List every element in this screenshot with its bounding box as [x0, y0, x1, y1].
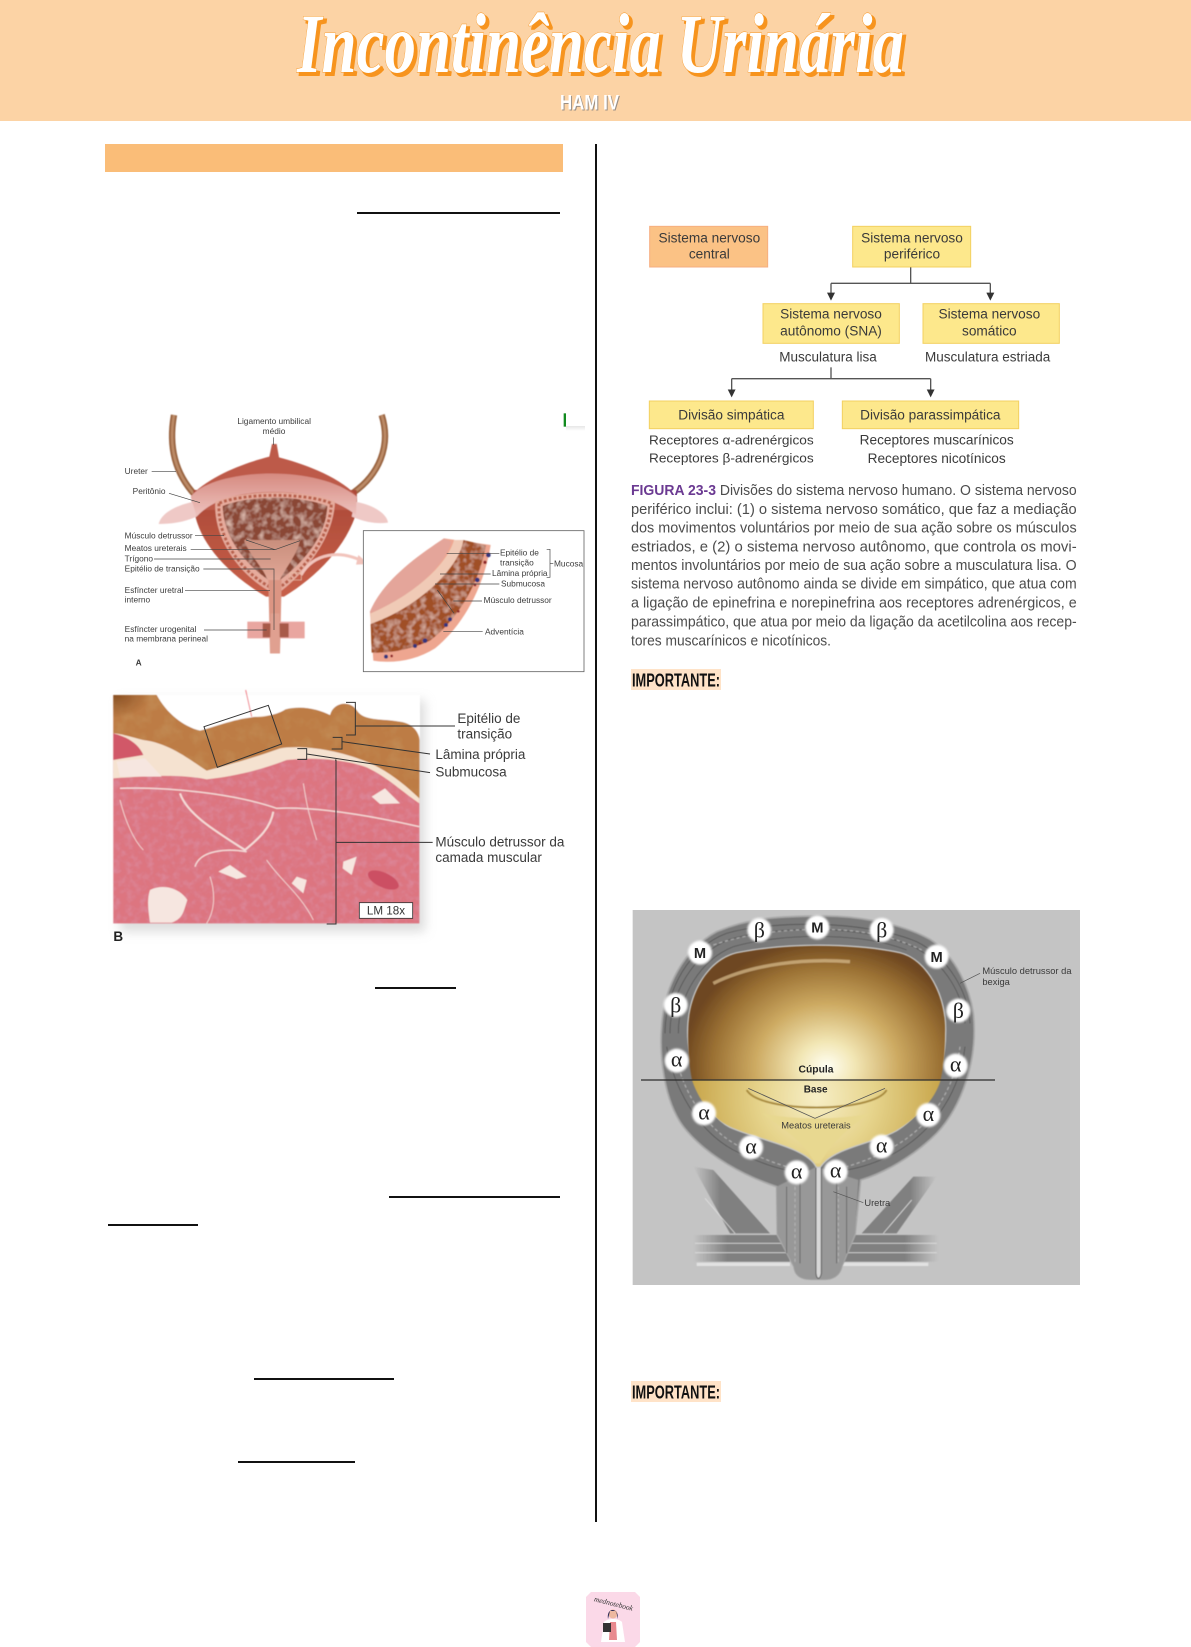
section heading bar	[105, 144, 563, 172]
figure B: histology micrograph	[112, 690, 565, 944]
figure A labels: Esfíncter uretral	[125, 585, 184, 595]
scale tag: LM 18x	[367, 905, 405, 918]
figure A labels	[125, 416, 311, 668]
figure caption: tores muscarínicos e nicotínicos.	[631, 634, 831, 650]
detail inset: bladder wall layers: transição	[500, 557, 534, 567]
logo: mednotebook	[593, 1594, 635, 1613]
somatic box: Sistema nervoso	[938, 307, 1041, 322]
detail inset: bladder wall layers: Lâmina própria	[492, 568, 548, 578]
figure caption: periférico inclui: (1) o sistema nervoso somático, que faz a mediação	[631, 502, 1077, 518]
receptor markers: α	[671, 1047, 683, 1072]
receptor markers: α	[830, 1158, 842, 1183]
figure B labels: B	[113, 929, 123, 944]
peripheral nervous system box	[853, 226, 971, 267]
underlined blank text 1	[357, 212, 560, 214]
central nervous system box	[650, 226, 768, 267]
receptor labels: Receptores muscarínicos	[860, 432, 1014, 447]
logo	[586, 1592, 640, 1647]
anatomical drawing	[159, 415, 388, 653]
detail inset: bladder wall layers	[363, 531, 584, 672]
figure A labels: Trígono	[125, 553, 153, 563]
figure B labels: Lâmina própria	[435, 747, 526, 762]
underlined blank text 2	[375, 987, 456, 988]
receptor figure labels: Meatos ureterais	[781, 1120, 851, 1130]
central nervous system box: Sistema nervoso	[658, 231, 761, 246]
peripheral nervous system box: periférico	[884, 247, 940, 262]
figure B labels: camada muscular	[435, 850, 542, 865]
figure B labels: transição	[457, 727, 512, 742]
detail inset: bladder wall layers: Epitélio de	[500, 548, 539, 558]
receptor markers: α	[791, 1158, 803, 1183]
receptor figure labels: bexiga	[982, 977, 1011, 987]
figure B labels: Submucosa	[435, 765, 507, 780]
figure A labels: Esfíncter urogenital	[125, 624, 197, 634]
peripheral nervous system box: Sistema nervoso	[861, 231, 963, 246]
receptor figure labels: Cúpula	[798, 1064, 834, 1075]
autonomic box	[763, 304, 899, 343]
receptor figure labels	[781, 966, 1072, 1208]
receptor markers: α	[950, 1052, 962, 1077]
pelvic floor muscles	[693, 1167, 938, 1266]
figure A labels: Epitélio de transição	[125, 564, 200, 574]
receptor labels: Receptores α-adrenérgicos	[649, 432, 814, 447]
figure caption: mentos involuntários por meio de sua ação sobre a musculatura lisa. O	[631, 558, 1077, 574]
receptor markers: α	[745, 1133, 757, 1158]
figure caption: a ligação de epinefrina e norepinefrina aos receptores adrenérgicos, e	[631, 595, 1077, 611]
green mark	[564, 413, 566, 427]
receptor markers: α	[923, 1101, 935, 1126]
flowchart: divisions of nervous system	[648, 226, 1060, 466]
figure A labels: Ureter	[125, 466, 148, 476]
figure A labels: na membrana perineal	[125, 634, 208, 644]
micrograph shadow	[120, 700, 425, 932]
receptor labels: Receptores β-adrenérgicos	[649, 451, 814, 466]
receptor markers: M	[694, 946, 706, 962]
bladder cavity: dome and base	[688, 946, 945, 1167]
underlined blank text 5	[254, 1378, 394, 1380]
parasympathetic box: Divisão parassimpática	[860, 407, 1001, 422]
figure A labels: Músculo detrussor	[125, 530, 193, 540]
central nervous system box: central	[689, 247, 730, 262]
figure: bladder receptors	[632, 910, 1080, 1285]
muscle labels: Musculatura estriada	[925, 349, 1051, 364]
receptor markers	[664, 915, 970, 1184]
muscle labels	[779, 349, 1051, 364]
receptor markers: β	[670, 992, 681, 1017]
micrograph image	[113, 690, 420, 923]
receptor markers: β	[876, 917, 887, 942]
receptor markers: β	[754, 917, 765, 942]
somatic box: somático	[962, 324, 1017, 339]
figure A labels: interno	[125, 595, 150, 605]
receptor figure labels: Músculo detrussor da	[982, 966, 1072, 976]
detail inset: bladder wall layers: Músculo detrussor	[484, 595, 552, 605]
figure A labels: Meatos ureterais	[125, 543, 187, 553]
figure A labels: A	[136, 658, 142, 668]
detail inset: bladder wall layers: Adventícia	[485, 626, 524, 636]
somatic box	[923, 304, 1059, 343]
figure A labels: médio	[263, 426, 286, 436]
bladder wall and urethra	[661, 916, 974, 1279]
underlined blank text 6	[238, 1461, 355, 1462]
detail inset: bladder wall layers: Mucosa	[554, 558, 584, 568]
column divider	[595, 144, 596, 1522]
grey background	[633, 910, 1080, 1285]
header banner	[0, 0, 1191, 121]
figure caption	[631, 483, 1077, 650]
figure caption: FIGURA 23-3 Divisões do sistema nervoso humano. O sistema nervoso	[631, 483, 1077, 499]
figure A: bladder anatomy	[124, 413, 584, 672]
receptor figure labels: Base	[804, 1085, 828, 1096]
connector arrows	[732, 267, 990, 394]
figure caption: estriados, e (2) o sistema nervoso autônomo, que controla os movi-	[631, 539, 1077, 555]
receptor figure labels: Uretra	[864, 1198, 891, 1208]
figure caption: sistema nervoso autônomo ainda se divide em simpático, que atua com	[631, 577, 1077, 593]
receptor labels: Receptores nicotínicos	[868, 451, 1006, 466]
parasympathetic box	[842, 401, 1019, 429]
figure B labels	[113, 711, 565, 944]
callout brackets and leader lines	[204, 702, 455, 924]
figure caption: parassimpático, que atua por meio da ligação da acetilcolina aos recep-	[631, 615, 1077, 631]
dome/base dividing line	[641, 1078, 995, 1082]
receptor markers: β	[953, 998, 964, 1023]
muscle labels: Musculatura lisa	[779, 349, 877, 364]
receptor markers: M	[811, 920, 823, 936]
autonomic box: autônomo (SNA)	[780, 324, 882, 339]
receptor markers: M	[931, 950, 943, 966]
underlined blank text 3	[389, 1196, 560, 1198]
detail inset: bladder wall layers: Submucosa	[501, 579, 545, 589]
autonomic box: Sistema nervoso	[780, 307, 882, 322]
figure B labels: Músculo detrussor da	[435, 835, 565, 850]
figure B labels: Epitélio de	[457, 711, 520, 726]
ureteral meatus lines	[748, 1088, 885, 1118]
figure A labels: Ligamento umbilical	[237, 416, 311, 426]
receptor labels	[649, 432, 1014, 466]
sympathetic box: Divisão simpática	[678, 407, 785, 422]
receptor markers: α	[698, 1099, 710, 1124]
figure A labels: Peritônio	[133, 486, 166, 496]
figure caption: dos movimentos voluntários por meio de sua ação sobre os músculos	[631, 521, 1077, 537]
scale tag	[359, 903, 413, 918]
grey fragment beside mark	[566, 426, 585, 431]
receptor markers: α	[876, 1133, 888, 1158]
underlined blank text 4	[108, 1224, 198, 1226]
sympathetic box	[649, 401, 813, 429]
